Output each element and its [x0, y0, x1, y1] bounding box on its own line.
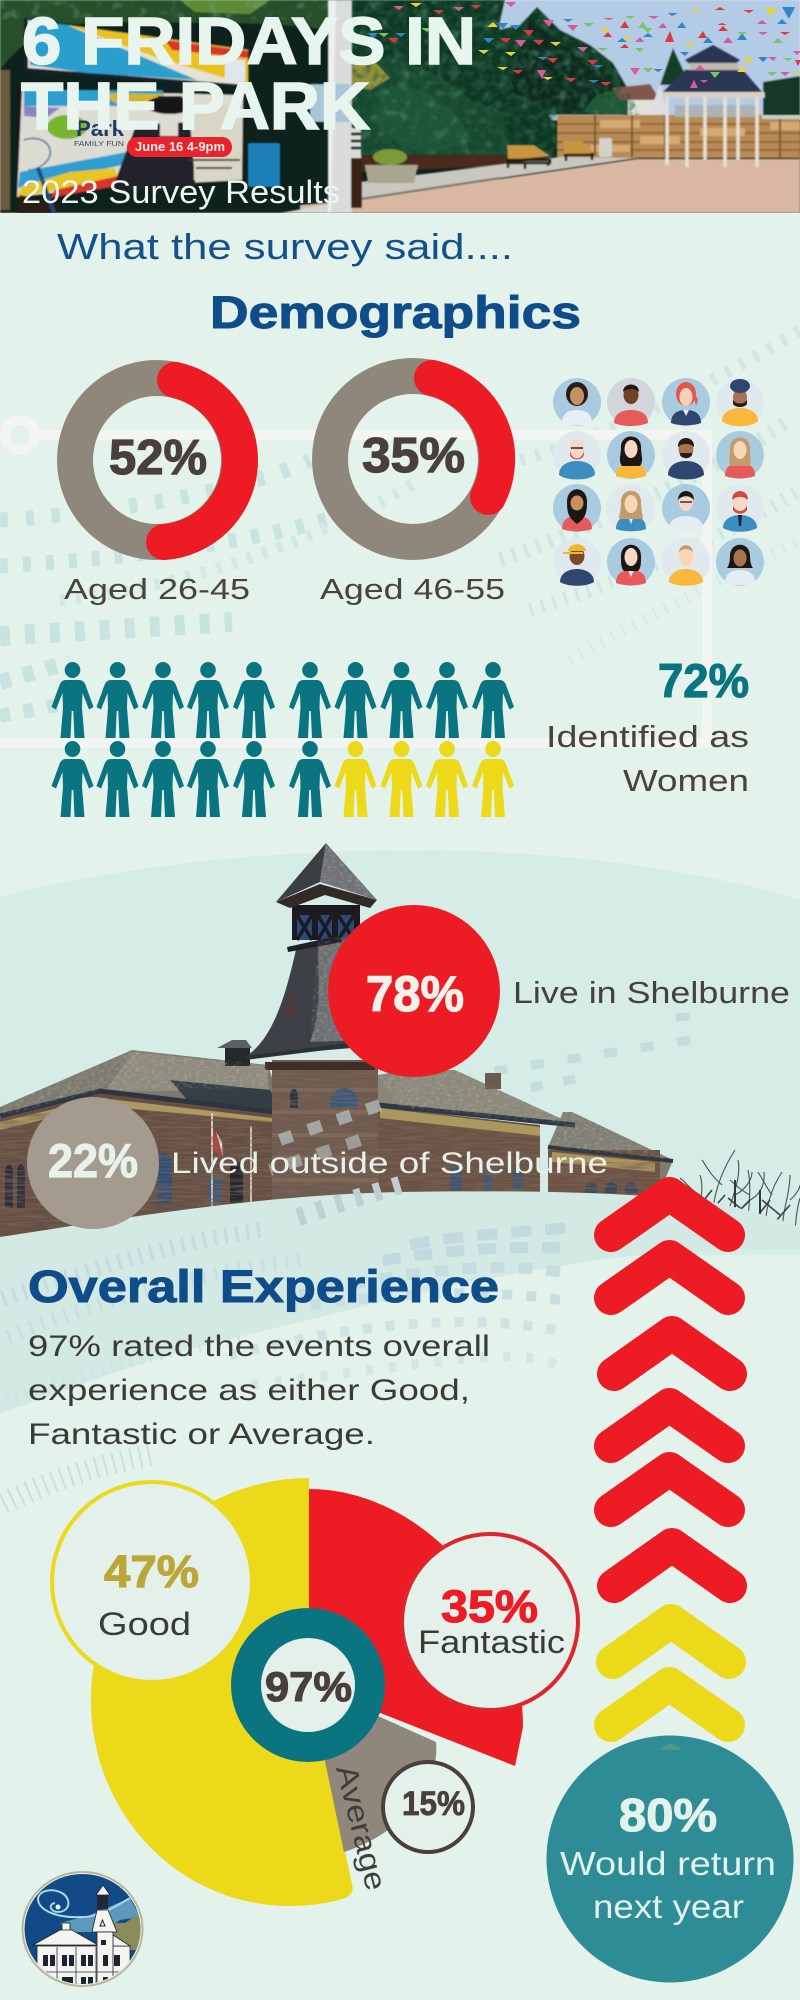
- callout: 80% would return next year: 80%: [619, 1789, 717, 1841]
- right main roof and wall: [378, 1070, 575, 1125]
- building surface textures: [0, 843, 673, 1240]
- white connector lines: [0, 420, 707, 743]
- overall experience description: experience as either Good,: [28, 1374, 470, 1407]
- sector: average: [309, 1685, 436, 1852]
- callout: 15% average: 15%: [402, 1785, 465, 1823]
- header photo: park plaza with signboard, trees, bunting and gazebo: [0, 0, 800, 213]
- bare trees: [680, 1150, 800, 1240]
- pictogram: people row chart in teal and yellow: [52, 662, 514, 817]
- chevron arrows rising to 80%: [611, 1194, 730, 1725]
- label: average: Average: [329, 1762, 392, 1894]
- subtitle: 2023 Survey Results: [22, 174, 340, 210]
- poster text: June 16 4-9pm: [135, 139, 225, 154]
- callout: 22% lived outside of Shelburne: [27, 1097, 608, 1229]
- dash pattern overlay: building and overall experience: [0, 1105, 565, 1505]
- callout: 78% live in Shelburne: 78%: [366, 966, 464, 1022]
- callout: 47% good: 47%: [104, 1546, 199, 1597]
- background dash pattern: demographics: [0, 330, 800, 716]
- overall experience description: 97% rated the events overall: [28, 1330, 490, 1363]
- centre ring: 97%: 97%: [265, 1663, 352, 1710]
- poster text: Park: [76, 116, 125, 141]
- stat: 72% identified as women: Women: [623, 763, 749, 798]
- callout: 80% would return next year: next year: [593, 1888, 744, 1925]
- stat: 72% identified as women: [546, 654, 749, 798]
- sector: good: [91, 1478, 353, 1906]
- callout: 80% would return next year: Would return: [560, 1845, 776, 1882]
- poster text: FAMILY FUN: [74, 141, 124, 148]
- callout: 15% average: [383, 1762, 473, 1852]
- callout: 35% fantastic: 35%: [441, 1581, 538, 1632]
- donut: aged 46-55: Aged 46-55: [320, 574, 505, 606]
- sky band behind town hall: [0, 850, 800, 1255]
- lower wave band: [0, 1191, 800, 1413]
- title: THE PARK: [21, 69, 370, 144]
- callout: 80% would return next year: [546, 1736, 794, 1982]
- overall experience description: Fantastic or Average.: [28, 1418, 375, 1451]
- donut: aged 26-45: Aged 26-45: [64, 574, 250, 606]
- intro heading: What the survey said....: [57, 226, 513, 267]
- heading: overall experience: Overall Experience: [28, 1261, 499, 1312]
- title: 6 FRIDAYS IN: [22, 4, 476, 79]
- callout: 78% live in Shelburne: [328, 905, 790, 1077]
- stat: 72% identified as women: 72%: [658, 654, 749, 707]
- right wing: [548, 1112, 673, 1192]
- stat: 72% identified as women: Identified as: [546, 719, 749, 754]
- pie chart: overall experience ratings: [52, 1478, 578, 1906]
- callout: 35% fantastic: [402, 1534, 578, 1710]
- left wing roof and wall: [0, 1050, 283, 1117]
- callout: 47% good: Good: [98, 1606, 191, 1642]
- bunting pennants: [360, 2, 800, 88]
- donut: aged 26-45: 52%: [109, 431, 207, 485]
- title: [21, 4, 476, 144]
- donut: aged 26-45: [64, 378, 250, 606]
- poster text: [74, 120, 232, 157]
- donut: aged 46-55: [320, 376, 505, 606]
- callout: 22% lived outside of Shelburne: Lived outside of Shelburne: [171, 1147, 608, 1180]
- sector: fantastic: [309, 1489, 523, 1766]
- callout: 78% live in Shelburne: Live in Shelburne: [513, 975, 790, 1010]
- overall experience description: [28, 1330, 490, 1451]
- callout: 22% lived outside of Shelburne: 22%: [48, 1134, 138, 1187]
- foliage texture: [0, 0, 640, 155]
- heading: demographics: Demographics: [210, 287, 581, 338]
- logo: town crest with swirl sky and town hall: [20, 1870, 145, 1990]
- central tower: [272, 1060, 378, 1200]
- callout: 47% good: [52, 1482, 252, 1682]
- icon grid: diverse people avatars: [553, 378, 764, 586]
- centre ring: 97%: [246, 1623, 370, 1747]
- callout: 35% fantastic: Fantastic: [418, 1624, 565, 1660]
- sky dash pattern: [470, 1017, 690, 1088]
- town hall building photo: [0, 843, 800, 1240]
- donut: aged 46-55: 35%: [362, 429, 465, 483]
